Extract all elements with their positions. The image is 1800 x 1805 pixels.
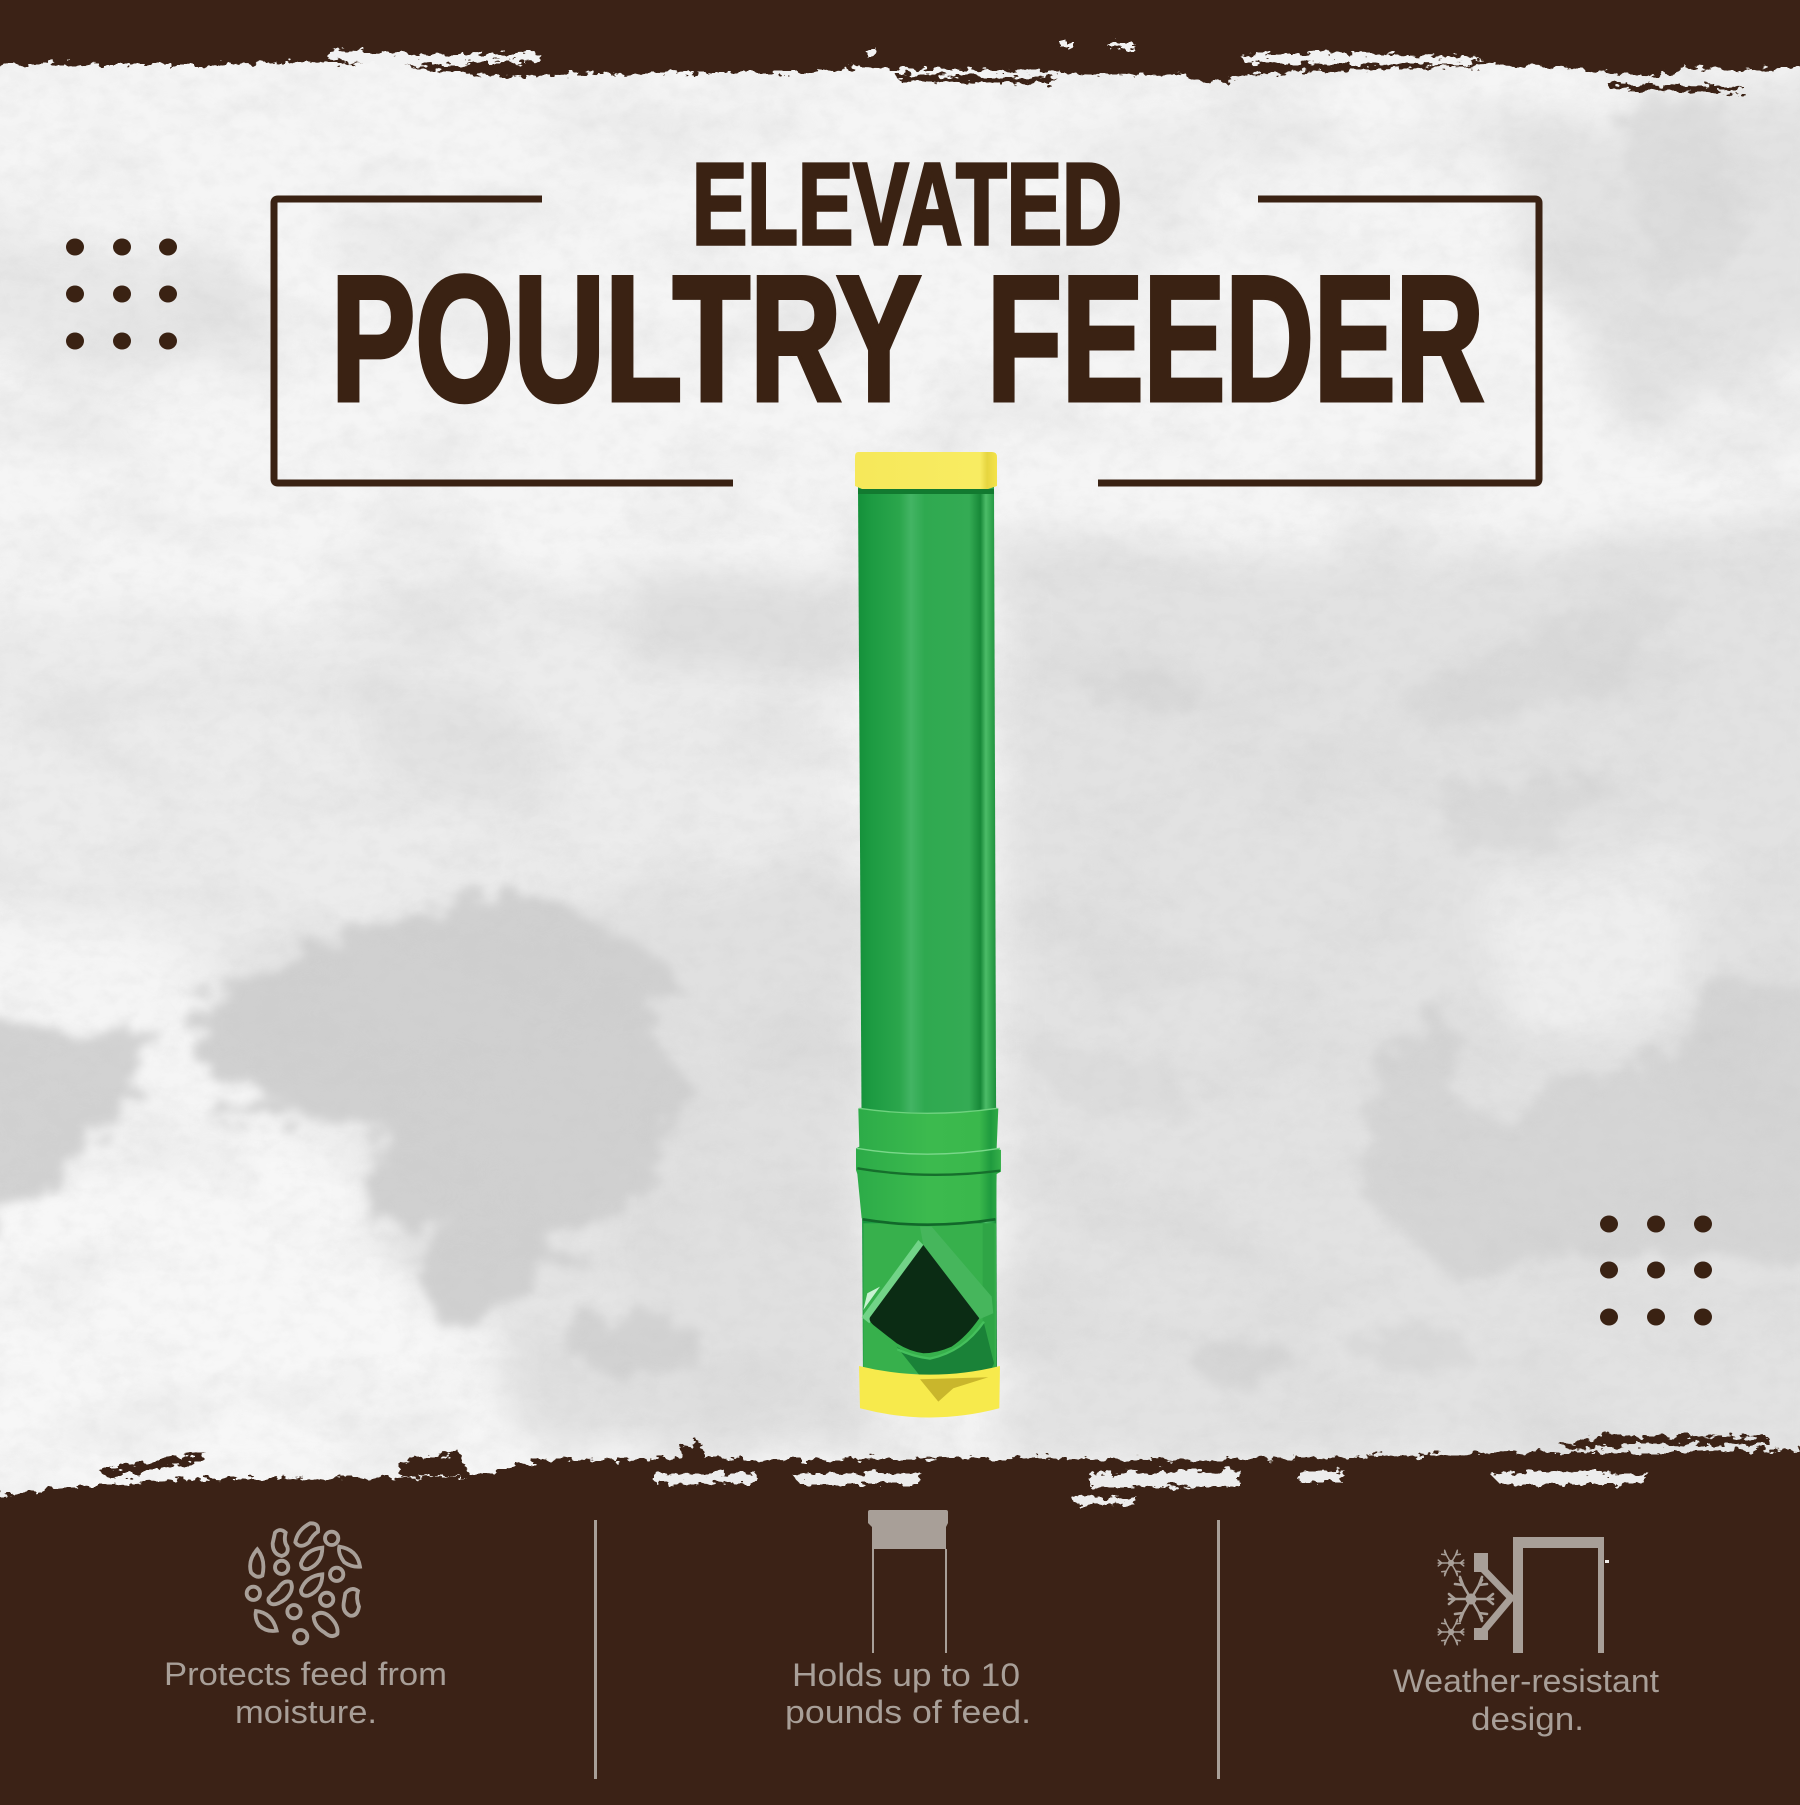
- caption: Protects feed from: [164, 1656, 447, 1692]
- decorative dot grid: bottom right: [1600, 1216, 1712, 1326]
- vertical divider left: [594, 1520, 597, 1779]
- title: elevated: ELEVATED: [692, 139, 1122, 269]
- dark diamond opening: [870, 1245, 979, 1353]
- feature 1: protects feed: [164, 1523, 447, 1730]
- lip of opening: [897, 1322, 984, 1359]
- decorative dot grid: top left: [66, 238, 177, 350]
- top yellow cap: [855, 452, 997, 489]
- caption: Weather-resistant: [1393, 1663, 1659, 1699]
- caption: [164, 1656, 447, 1730]
- collar: [856, 1108, 1001, 1223]
- lower feeder body, drawn in zoom units: [856, 1108, 1001, 1417]
- product: green elevated feeder tube: [855, 452, 1001, 1417]
- feature 3: weather resistant: [1393, 1537, 1659, 1737]
- caption: design.: [1471, 1701, 1584, 1737]
- bottom yellow base: [859, 1366, 1000, 1417]
- feature 2: holds 10 pounds: [785, 1510, 1031, 1730]
- title frame: [274, 199, 1539, 483]
- tube body: [858, 486, 997, 1380]
- yellow base shadow: [920, 1377, 988, 1402]
- caption: Holds up to 10: [792, 1657, 1020, 1693]
- icon: feeder capacity: [868, 1510, 948, 1653]
- bottom torn brown band: [0, 1435, 1800, 1805]
- icon: door with snowflakes: [1438, 1537, 1609, 1653]
- collar ridge lines: [857, 1108, 1000, 1225]
- caption: pounds of feed.: [785, 1694, 1031, 1730]
- shadow under top cap: [858, 489, 994, 494]
- lower tube: [863, 1223, 996, 1373]
- caption: moisture.: [235, 1694, 377, 1730]
- top torn brown band: [0, 0, 1800, 93]
- vertical divider right: [1217, 1520, 1220, 1779]
- lower shadow: [897, 1323, 994, 1380]
- title: poultry feeder: FEEDER: [987, 239, 1484, 438]
- caption: [785, 1657, 1031, 1730]
- right bevel of opening: [920, 1227, 993, 1319]
- caption: [1393, 1663, 1659, 1737]
- icon: feed grains: [247, 1523, 360, 1643]
- left bevel of opening: [862, 1240, 923, 1323]
- title: poultry feeder: POULTRY: [331, 239, 921, 438]
